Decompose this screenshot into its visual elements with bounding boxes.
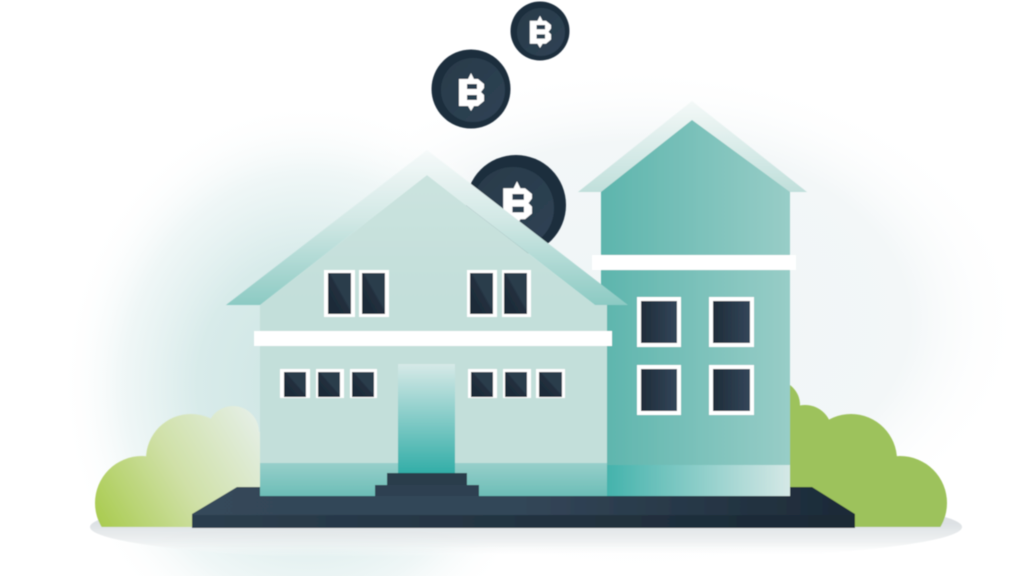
- coin: middle: [432, 50, 510, 128]
- tower roof: [578, 101, 807, 192]
- ground shadow: [90, 491, 962, 563]
- left bush: [94, 406, 260, 528]
- icon: bitcoin symbol: [503, 181, 532, 225]
- tower lower wall: [601, 270, 790, 496]
- tower base band: [601, 465, 790, 496]
- main roof: [226, 150, 628, 305]
- coin: behind roof: [466, 155, 566, 255]
- upper windows: [324, 270, 531, 317]
- icon: bitcoin symbol: [459, 73, 484, 111]
- tower upper wall: [601, 120, 790, 256]
- tower white band: [592, 255, 796, 270]
- icon: bitcoin symbol: [530, 16, 551, 48]
- main house: [226, 150, 628, 496]
- lower windows: [280, 369, 565, 398]
- base band: [260, 463, 607, 496]
- platform: [192, 487, 855, 528]
- white band: [254, 331, 612, 346]
- coin: top: [510, 2, 570, 60]
- door: [398, 364, 455, 474]
- tower: [578, 101, 807, 496]
- tower windows: [637, 297, 754, 415]
- main wall: [260, 175, 607, 496]
- steps: [375, 473, 479, 496]
- right bush: [789, 384, 948, 528]
